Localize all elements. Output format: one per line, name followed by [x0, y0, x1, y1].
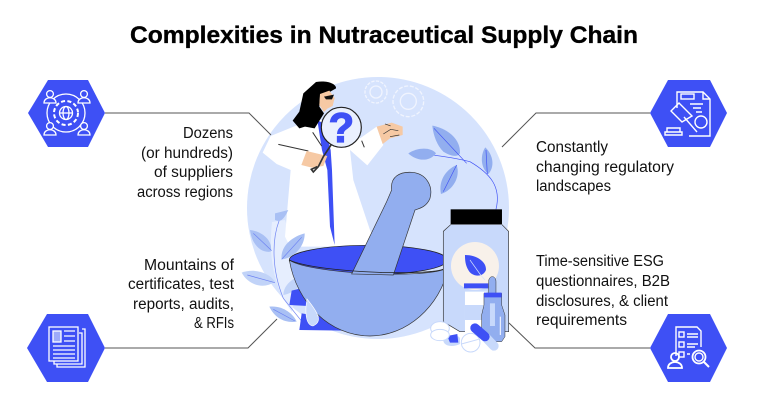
title: Complexities in Nutraceutical Supply Chain — [130, 22, 638, 49]
icon: gavel and document — [650, 80, 727, 147]
text: ESG: requirements — [536, 312, 627, 329]
text: regulatory: landscapes — [536, 178, 611, 195]
text: suppliers: of suppliers — [154, 164, 233, 181]
pestle — [352, 172, 431, 275]
dropper bottle — [482, 277, 505, 342]
text: certificates: certificates, test — [128, 276, 235, 293]
text: regulatory: changing regulatory — [536, 159, 674, 176]
question mark: ? — [329, 104, 354, 151]
text: certificates: reports, audits, — [133, 296, 234, 313]
shoes — [289, 288, 345, 331]
bottle body — [443, 225, 509, 332]
bowl body — [289, 260, 448, 336]
bottle cap — [451, 209, 502, 224]
pills — [431, 322, 494, 352]
left sprig front leaf — [306, 299, 319, 326]
mortar and pestle — [289, 245, 448, 338]
text: suppliers — [137, 125, 233, 201]
text: regulatory: Constantly — [536, 139, 608, 156]
raised hand — [377, 123, 403, 144]
leaves: right sprig — [408, 126, 497, 209]
text: ESG: disclosures, & client — [536, 293, 669, 310]
lab coat — [263, 120, 383, 247]
text: certificates — [128, 257, 235, 332]
icon: global supplier network — [28, 80, 105, 147]
blouse and tie — [317, 120, 335, 245]
label circle — [451, 242, 499, 290]
pale crescent behind left sprig — [271, 220, 300, 312]
magnifier handle — [311, 144, 332, 172]
icon: gears — [365, 81, 424, 117]
text: certificates: Mountains of — [144, 257, 235, 274]
small jar — [464, 283, 488, 288]
bowl rim over pestle base — [289, 260, 445, 273]
hair — [293, 81, 336, 128]
supplement bottle — [443, 209, 509, 342]
leaf on label — [465, 255, 486, 276]
hand holding magnifier — [301, 151, 327, 168]
face — [319, 91, 335, 112]
glasses — [324, 95, 334, 99]
coat collar and sleeve lines — [278, 132, 364, 151]
leaves: left sprig — [242, 210, 305, 323]
connector lines — [105, 113, 650, 348]
text: regulatory — [536, 139, 674, 195]
text: suppliers: across regions — [137, 184, 233, 201]
bowl interior — [289, 245, 447, 275]
bowl shadow — [340, 300, 447, 338]
icon: stacked documents — [27, 314, 105, 382]
text: ESG — [536, 253, 670, 329]
icon: checklist and magnifier — [650, 314, 727, 382]
text: ESG: Time-sensitive ESG — [536, 253, 664, 270]
text: suppliers: (or hundreds) — [141, 145, 233, 162]
magnifying glass — [321, 107, 361, 147]
text: suppliers: Dozens — [183, 125, 233, 142]
text: certificates: & RFIs — [194, 315, 234, 332]
text: ESG: questionnaires, B2B — [536, 273, 670, 290]
background circle — [247, 77, 509, 339]
illustration: scientist — [263, 81, 403, 247]
